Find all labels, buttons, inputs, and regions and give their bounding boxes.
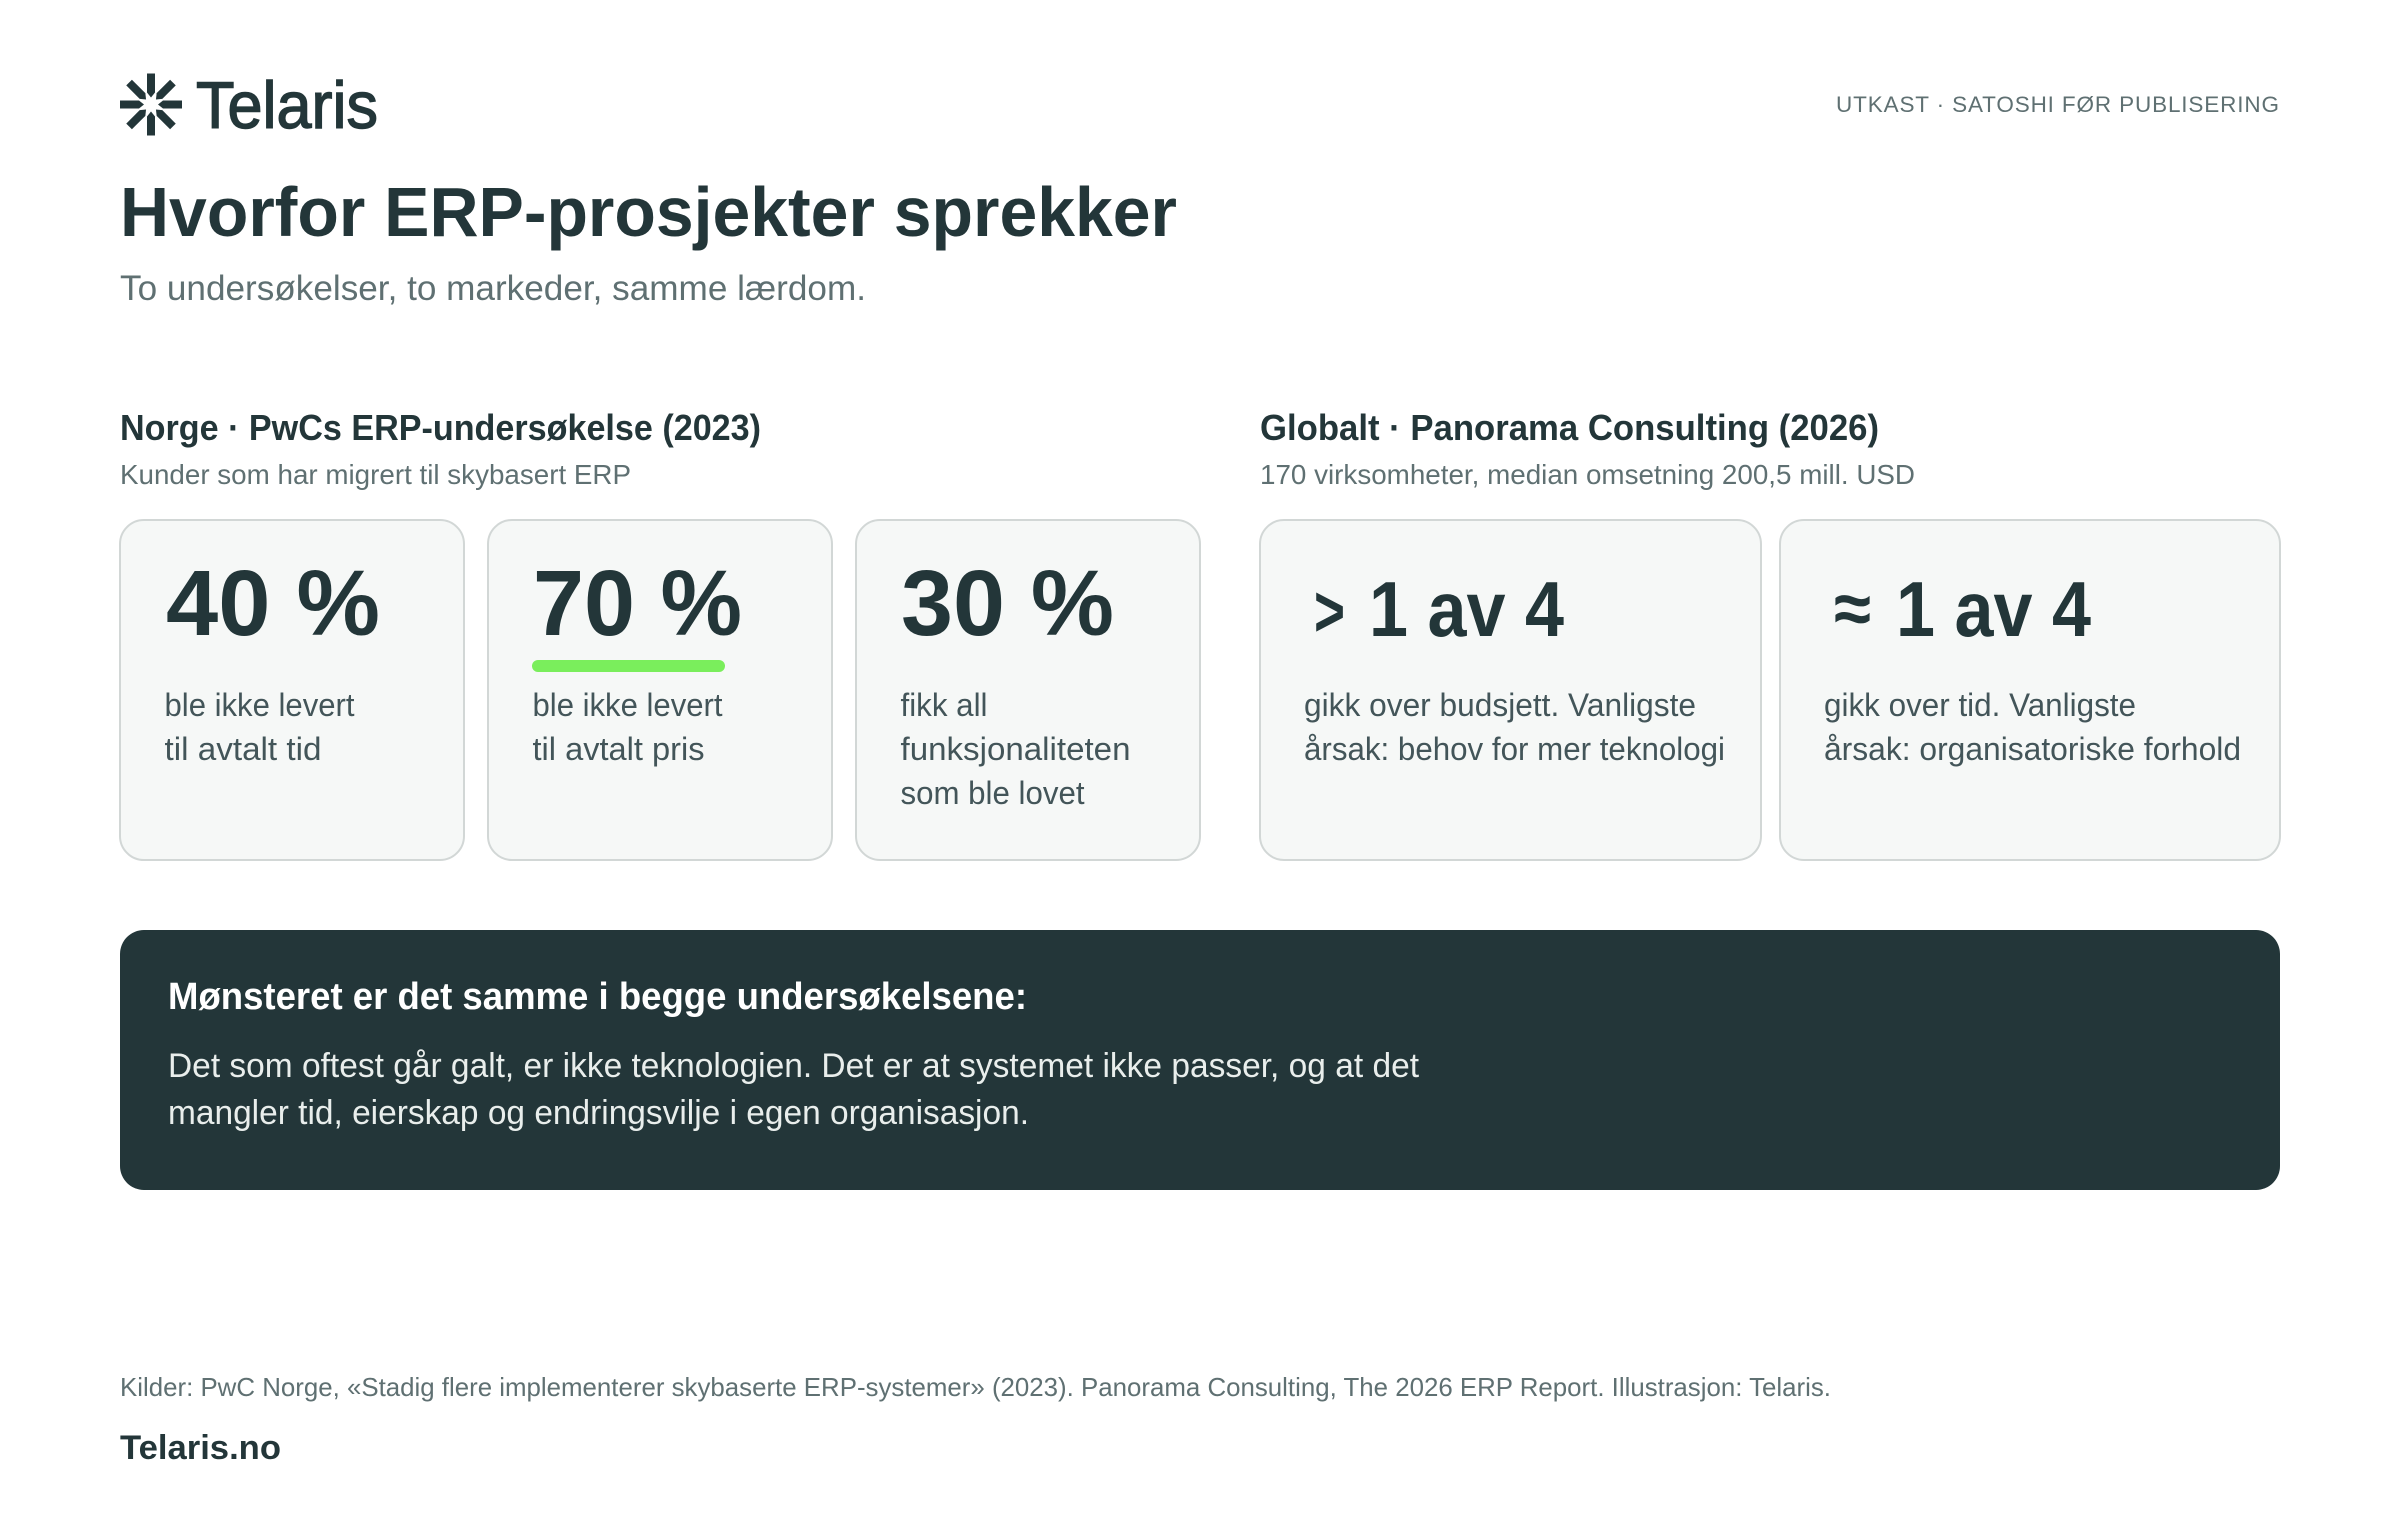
highlight underline <box>532 660 725 672</box>
card: 70 % <box>488 520 832 860</box>
subtitle: To undersøkelser, to markeder, samme lærdom. <box>120 269 866 308</box>
callout body: mangler tid, eierskap og endringsvilje i egen organisasjon. <box>168 1094 1029 1132</box>
subheading: Globalt: 170 virksomheter, median omsetning 200,5 mill. USD <box>1260 459 1915 490</box>
card: 30 % <box>856 520 1200 860</box>
description: gikk over tid. Vanligste <box>1824 687 2136 723</box>
approximately sign: ≈ <box>1834 569 1871 649</box>
callout: pattern <box>120 930 2280 1190</box>
callout heading: Mønsteret er det samme i begge undersøkelsene: <box>168 976 1027 1018</box>
draft label: UTKAST · SATOSHI FØR PUBLISERING <box>1836 92 2279 117</box>
logo: Telaris <box>120 68 378 142</box>
greater-than sign: > <box>1314 572 1345 652</box>
description: gikk over budsjett. Vanligste <box>1304 687 1696 723</box>
title: Hvorfor ERP-prosjekter sprekker <box>120 173 1177 251</box>
heading: Norge: Norge · PwCs ERP-undersøkelse (2023) <box>120 407 761 448</box>
card: over time: 1 av 4 <box>1896 565 2091 653</box>
subheading: Norge: Kunder som har migrert til skybasert ERP <box>120 459 631 490</box>
heading: Globalt: Globalt · Panorama Consulting (2026) <box>1260 407 1879 448</box>
panel: Globalt <box>1260 407 2280 860</box>
panel: Norge <box>120 407 1200 860</box>
card: 40 % <box>120 520 464 860</box>
description: fikk all <box>900 687 988 723</box>
description: til avtalt pris <box>532 731 704 767</box>
description: som ble lovet <box>900 775 1085 811</box>
card: 30 %: 30 % <box>901 551 1114 655</box>
description: årsak: behov for mer teknologi <box>1304 731 1725 767</box>
description: funksjonaliteten <box>900 731 1130 767</box>
card: over time <box>1780 520 2280 860</box>
card: 40 %: 40 % <box>166 551 380 655</box>
card: over budget <box>1260 520 1761 860</box>
wordmark: Telaris <box>196 68 378 142</box>
description: årsak: organisatoriske forhold <box>1824 731 2241 767</box>
card: over budget: 1 av 4 <box>1369 565 1564 653</box>
card: 70 %: 70 % <box>533 551 742 655</box>
icon: star mark <box>120 74 182 136</box>
description: ble ikke levert <box>164 687 355 723</box>
footer brand: Telaris.no <box>120 1429 281 1467</box>
sources: Kilder: PwC Norge, «Stadig flere implementerer skybaserte ERP-systemer» (2023). Panorama Consulting, The 2026 ERP Report. Illustrasjon: Telaris. <box>120 1372 1831 1402</box>
description: til avtalt tid <box>164 731 322 767</box>
callout body: Det som oftest går galt, er ikke teknologien. Det er at systemet ikke passer, og at det <box>168 1047 1420 1085</box>
description: ble ikke levert <box>532 687 723 723</box>
